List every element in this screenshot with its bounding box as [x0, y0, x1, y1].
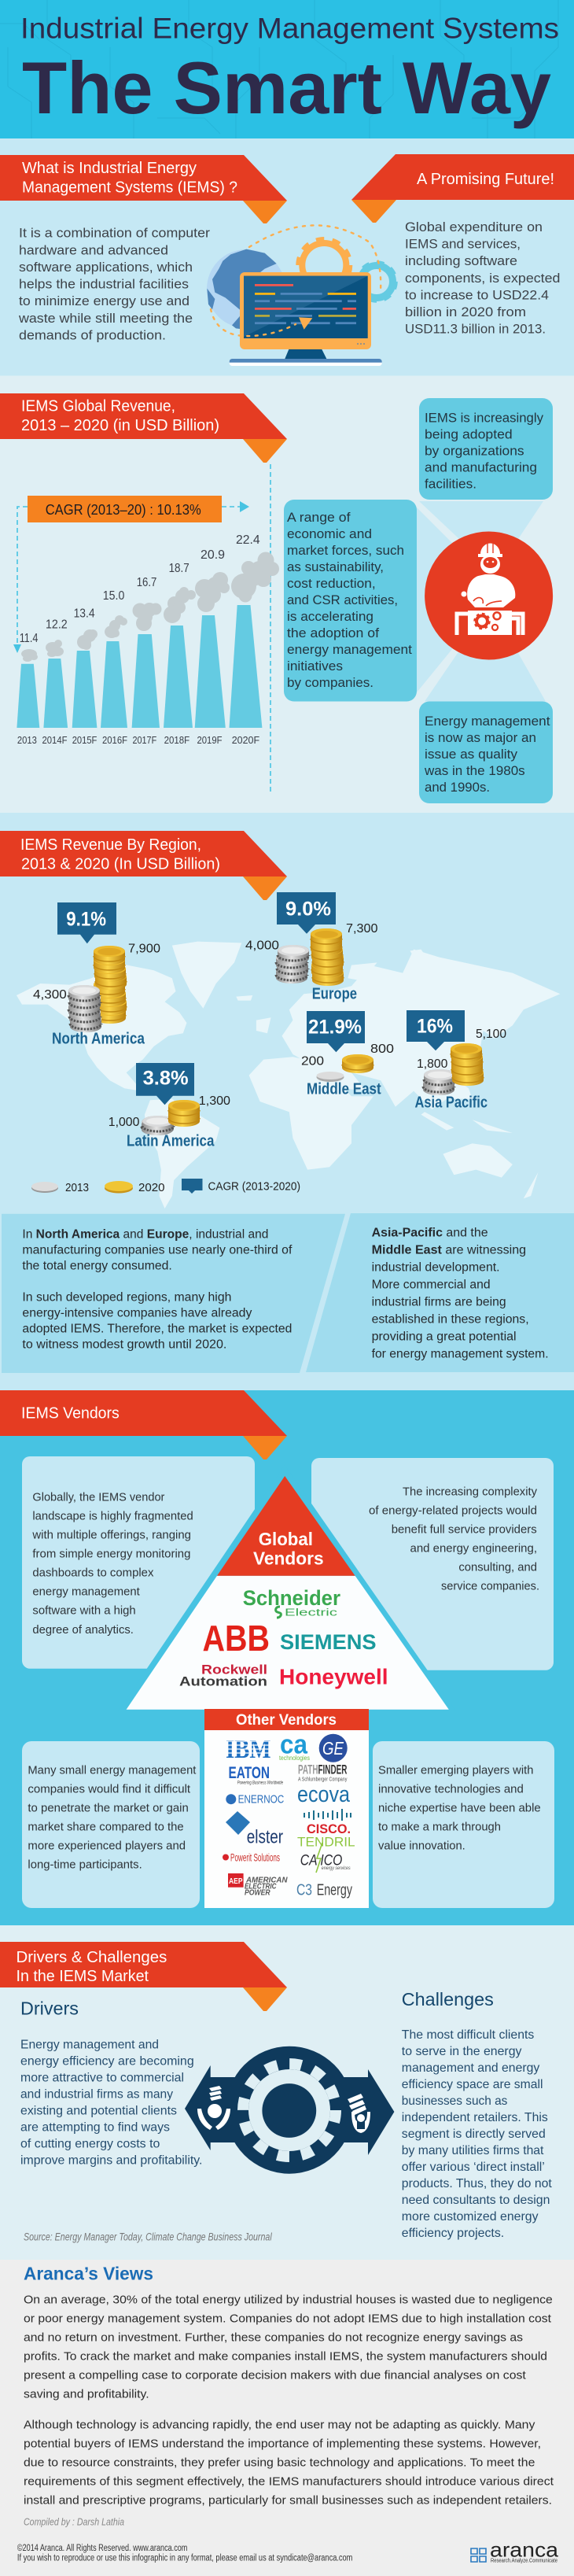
icon: monitor with globe and gears: [207, 225, 396, 366]
text panel: asia-pacific and middle east: providing a great potential: [372, 1330, 517, 1344]
value labels: 13.4: [74, 607, 95, 621]
region: europe: [245, 892, 378, 1002]
text: challenges: more customized energy: [402, 2210, 538, 2224]
ribbon: revenue by region: IEMS Revenue By Region,: [20, 836, 201, 854]
text panel: asia-pacific and middle east: industrial development.: [372, 1261, 500, 1275]
text: views paragraph 2: [24, 2419, 554, 2508]
callout: complexity: [311, 1458, 554, 1670]
text: IEMS definition: It is a combination of computer: [19, 226, 210, 241]
logo: Aranca: Research.Analyze.Communicate: [491, 2557, 557, 2564]
region: europe: Europe: [312, 985, 357, 1002]
region: asia pacific: 1,800: [417, 1057, 448, 1071]
legend: 2013: [65, 1181, 89, 1194]
text: IEMS definition: waste while still meeting the: [18, 311, 193, 326]
callout: market forces: as sustainability,: [287, 560, 384, 574]
callout: market forces: cost reduction,: [287, 577, 376, 591]
text: challenges: The most difficult clients: [402, 2028, 534, 2042]
callout: complexity: service companies.: [441, 1580, 539, 1593]
value labels: 18.7: [169, 562, 189, 575]
year labels: 2015F: [72, 735, 98, 746]
callout: CAGR: CAGR (2013–20) : 10.13%: [46, 501, 201, 518]
value labels: 16.7: [137, 576, 156, 589]
icon: gear with arrows: [185, 2046, 394, 2174]
callout: market forces: market forces, such: [287, 544, 404, 558]
world map: [17, 942, 560, 1209]
logo: Calico: energy services: [322, 1866, 351, 1871]
logo: EnerNOC: ENERNOC: [238, 1792, 284, 1806]
callout: fragmented landscape: energy management: [32, 1585, 141, 1599]
text: promising future: IEMS and services,: [405, 237, 521, 252]
monitor frame: [240, 272, 371, 349]
region: middle east: 21.9%: [308, 1016, 362, 1038]
ribbon: global revenue: [0, 393, 287, 463]
logo: C3 Energy: C3: [296, 1881, 312, 1899]
region: asia pacific: 16%: [417, 1016, 453, 1038]
compiled by: Compiled by : Darsh Lathia: [24, 2515, 124, 2527]
region: middle east: 200: [301, 1055, 324, 1068]
text: views paragraph 1: and no return on investment. Further, these companies do not recognize energy savings as: [24, 2331, 523, 2345]
region: asia pacific: Asia Pacific: [415, 1094, 488, 1112]
callout: complexity: consulting, and: [458, 1561, 537, 1574]
callout: market forces: by companies.: [287, 676, 373, 690]
callout: fragmented landscape: [22, 1456, 255, 1669]
text: drivers: and industrial firms as many: [20, 2087, 173, 2101]
logo: Pathfinder: [298, 1762, 348, 1783]
region: asia pacific: [407, 1010, 506, 1112]
logo: CA technologies: technologies: [279, 1755, 310, 1762]
value labels: 12.2: [46, 618, 68, 632]
logo: Rockwell Automation: [179, 1663, 267, 1688]
callout: small companies: Many small energy management: [28, 1764, 197, 1777]
logo: Aranca: aranca: [490, 2537, 559, 2561]
callout: market forces: energy management: [287, 643, 412, 657]
text: challenges: businesses such as: [402, 2094, 507, 2108]
logo: C3 Energy: Energy: [317, 1881, 352, 1899]
value labels: 11.4: [20, 632, 38, 645]
chimneys: [17, 605, 262, 728]
pyramid: global vendors: Global: [259, 1529, 313, 1549]
callout: small companies: [22, 1741, 200, 1908]
text panel: north america and europe: manufacturing companies use nearly one-third of: [22, 1243, 293, 1257]
callout: adoption: IEMS is increasingly: [425, 411, 544, 425]
ribbon: what is IEMS: Management Systems (IEMS) ?: [22, 179, 237, 196]
callout: emerging players: to make a mark through: [378, 1821, 501, 1834]
year labels: 2018F: [164, 735, 190, 746]
callout: CAGR: [28, 496, 222, 522]
logo: Cisco: [304, 1809, 351, 1836]
logo: AEP: AEP: [229, 1877, 243, 1886]
text: challenges: offer various ‘direct install’: [402, 2161, 545, 2174]
text: views paragraph 1: present a compelling case to corporate decision makers with due financial analyses on cost: [24, 2369, 527, 2382]
year labels: 2013: [17, 735, 37, 746]
region: europe: 4,000: [245, 939, 279, 953]
callout: emerging players: value innovation.: [378, 1840, 465, 1853]
region: latin america: [109, 1063, 230, 1150]
text panel: asia-pacific and middle east: [306, 1213, 574, 1372]
panel: drivers and challenges: [0, 1942, 552, 2243]
logo: GE: [319, 1734, 348, 1762]
pyramid outline: [118, 1465, 456, 1711]
callout: major issue: is now as major an: [425, 731, 536, 745]
logo: Eaton: EATON: [228, 1764, 270, 1782]
text: views paragraph 1: [24, 2293, 553, 2401]
value labels: 20.9: [201, 548, 225, 562]
text panel: asia-pacific and middle east: More commercial and: [372, 1279, 491, 1292]
text: views paragraph 1: profits. To crack the market and make companies install IEMS, the system manufacturers should: [24, 2350, 547, 2364]
year labels: [17, 735, 259, 746]
callout: market forces: the adoption of: [287, 626, 379, 640]
callout: complexity: benefit full service providers: [392, 1523, 537, 1537]
footer copyright: If you wish to reproduce or use this infographic in any format, please email us at syndicate@aranca.com: [17, 2554, 352, 2563]
year labels: 2017F: [132, 735, 157, 746]
legend: [31, 1179, 300, 1194]
text: views paragraph 2: requirements of this segment effectively, the IEMS manufacturers should introduce various direct: [24, 2475, 554, 2489]
footer copyright: [17, 2544, 352, 2563]
text panel: asia-pacific and middle east: for energy management system.: [372, 1348, 549, 1361]
text panel: asia-pacific and middle east: industrial firms are being: [372, 1296, 506, 1309]
icon: orange gear: [298, 239, 350, 291]
text: IEMS definition: to minimize energy use and: [19, 293, 189, 308]
region: middle east: Middle East: [307, 1081, 381, 1098]
region: middle east: 800: [370, 1043, 394, 1056]
text: IEMS definition: demands of production.: [19, 328, 166, 343]
panel: IEMS vendors: [0, 1390, 554, 1908]
logo: Ecova: ecova: [297, 1782, 351, 1807]
value labels: 22.4: [236, 533, 260, 547]
smoke clouds: [21, 552, 279, 662]
text: views paragraph 1: On an average, 30% of the total energy utilized by industrial houses is wasted due to negligence: [24, 2293, 553, 2306]
text: challenges: efficiency space are small: [402, 2078, 543, 2091]
text: promising future: components, is expected: [405, 271, 560, 286]
title line 1: Industrial Energy Management Systems: [20, 13, 559, 44]
logo: Powerit Solutions: [223, 1851, 280, 1863]
text: challenges: products. Thus, they do not: [402, 2177, 552, 2190]
panel: Aranca's views: [17, 2263, 559, 2564]
arrow: cagr down: [13, 644, 21, 653]
ribbon: global revenue: 2013 – 2020 (in USD Billion): [21, 417, 219, 434]
callout: emerging players: [373, 1741, 554, 1908]
panel: other vendors: Other Vendors: [236, 1712, 337, 1729]
text: challenges: management and energy: [402, 2061, 539, 2075]
text panel: asia-pacific and middle east: Middle East are witnessing: [372, 1244, 526, 1257]
icon: bulb in hands: [197, 2086, 230, 2130]
callout: complexity: of energy-related projects would: [369, 1504, 537, 1518]
callout: emerging players: Smaller emerging players with: [378, 1764, 533, 1777]
text: drivers: more attractive to commercial: [20, 2071, 184, 2084]
icon: blue gear: [357, 263, 396, 301]
region: north america: North America: [52, 1031, 145, 1048]
arrow: cagr right: [240, 501, 249, 512]
text: challenges: independent retailers. This: [402, 2111, 548, 2124]
callout: adoption: [419, 398, 553, 500]
text: challenges: efficiency projects.: [402, 2227, 504, 2240]
logo: AEP: ELECTRIC: [245, 1883, 277, 1891]
text: views paragraph 2: potential buyers of IEMS understand the importance of implementing these systems. However,: [24, 2438, 541, 2451]
callout: major issue: [419, 702, 553, 803]
logo: AEP: AMERICAN: [245, 1877, 288, 1885]
callout: fragmented landscape: Globally, the IEMS vendor: [32, 1490, 164, 1504]
title line 2: The Smart Way: [22, 46, 551, 129]
logo: AEP: [228, 1873, 288, 1898]
text panel: north america and europe: the total energy consumed.: [22, 1259, 172, 1272]
text: IEMS definition: helps the industrial facilities: [19, 277, 189, 292]
region: europe: 9.0%: [285, 898, 331, 920]
text: IEMS definition: hardware and advanced: [19, 242, 168, 257]
icon: worker at machine: [425, 532, 553, 659]
heading: drivers: Drivers: [20, 1998, 79, 2019]
callout: market forces: is accelerating: [287, 610, 373, 624]
text: promising future: USD11.3 billion in 2013.: [405, 322, 546, 337]
logo: CA technologies: ca: [280, 1729, 308, 1759]
callout: small companies: to penetrate the market or gain: [28, 1802, 189, 1815]
text: views paragraph 1: or poor energy management system. Companies do not adopt IEMS due to high installation cost: [24, 2312, 552, 2326]
text: promising future: to increase to USD22.4: [405, 288, 549, 302]
logo: Schneider Electric: Electric: [285, 1606, 338, 1618]
text panel: north america and europe: energy-intensive companies have already: [22, 1306, 252, 1319]
text: challenges: need consultants to design: [402, 2194, 550, 2207]
logo: Schneider Electric: Schneider: [243, 1586, 340, 1610]
callout: fragmented landscape: from simple energy monitoring: [32, 1548, 190, 1561]
logo: Tendril: TENDRIL: [297, 1835, 355, 1850]
text: challenges: to serve in the energy: [402, 2045, 522, 2058]
logo: Siemens: SIEMENS: [280, 1630, 377, 1654]
region: north america: [33, 902, 160, 1048]
text panel: asia-pacific and middle east: established in these regions,: [372, 1313, 529, 1327]
logo: Cisco: CISCO.: [307, 1821, 351, 1836]
text: drivers: existing and potential clients: [20, 2104, 177, 2117]
logo: AEP: POWER: [245, 1889, 270, 1898]
text: promising future: including software: [405, 253, 517, 268]
chart: chimney bars: [17, 533, 279, 746]
logo: Elster: elster: [247, 1827, 283, 1848]
callout: market forces: economic and: [287, 527, 372, 541]
callout: adoption: facilities.: [425, 477, 476, 491]
panel: other vendors: [204, 1709, 369, 1908]
callout: adoption: by organizations: [425, 444, 524, 458]
callout: emerging players: innovative technologies and: [378, 1783, 524, 1796]
logo: Eaton: Powering Business Worldwide: [237, 1781, 283, 1786]
region: latin america: 1,300: [199, 1094, 230, 1108]
text: IEMS definition: [18, 226, 210, 343]
pyramid: global vendors: [127, 1476, 449, 1710]
text: drivers: of cutting energy costs to: [20, 2137, 160, 2150]
callout: small companies: more experienced players and: [28, 1840, 186, 1853]
pyramid: global vendors: Vendors: [253, 1548, 324, 1568]
text: IEMS definition: software applications, which: [19, 260, 193, 275]
callout: major issue: issue as quality: [425, 747, 518, 762]
legend: 2020: [138, 1181, 165, 1194]
region: north america: 7,900: [128, 943, 160, 956]
callout: fragmented landscape: with multiple offerings, ranging: [31, 1529, 191, 1542]
panel: header: [0, 0, 559, 138]
year labels: 2019F: [197, 735, 223, 746]
text panel: north america and europe: In North America and Europe, industrial and: [22, 1227, 268, 1241]
text: drivers: improve margins and profitability.: [20, 2153, 202, 2167]
region: middle east: [301, 1011, 394, 1098]
callout: emerging players: niche expertise have been able: [378, 1802, 541, 1815]
logo: C3 Energy: [296, 1881, 352, 1899]
text: drivers: Energy management and: [20, 2038, 159, 2051]
logo: Pathfinder: A Schlumberger Company: [298, 1777, 348, 1783]
text panel: north america and europe: to witness modest growth until 2020.: [22, 1338, 226, 1351]
text: views paragraph 2: Although technology is advancing rapidly, the end user may not be adapting as quickly. Many: [24, 2419, 535, 2432]
region: latin america: 1,000: [109, 1116, 140, 1129]
legend: CAGR (2013-2020): [208, 1180, 300, 1194]
logo: ABB: ABB: [203, 1618, 270, 1659]
text panel: north america and europe: adopted IEMS. Therefore, the market is expected: [22, 1322, 292, 1335]
ribbon: what is IEMS: What is Industrial Energy: [22, 160, 197, 177]
text: promising future: Global expenditure on: [405, 220, 543, 234]
panel: IEMS global revenue: [0, 393, 553, 803]
logo: Honeywell: Honeywell: [279, 1665, 388, 1689]
callout: fragmented landscape: degree of analytics.: [32, 1623, 134, 1637]
ribbon: drivers and challenges: Drivers & Challenges: [16, 1949, 167, 1966]
text: drivers: [20, 2038, 202, 2167]
icon: globe: [207, 249, 285, 329]
dashed guide lines: [17, 464, 270, 794]
ribbon: revenue by region: [0, 831, 287, 900]
logo: Rockwell Automation: Rockwell: [201, 1663, 267, 1677]
text panel: north america and europe: In such developed regions, many high: [22, 1290, 231, 1304]
value labels: 15.0: [103, 589, 124, 603]
connector shapes around worker circle: [417, 501, 546, 702]
icon: person with coil: [348, 2094, 370, 2133]
callout: adoption: being adopted: [425, 427, 513, 441]
panel: revenue by region: [0, 831, 574, 1373]
region: north america: 4,300: [33, 988, 67, 1002]
ribbon: what is IEMS: [0, 155, 287, 223]
callout: fragmented landscape: software with a high: [32, 1604, 136, 1618]
heading: Aranca's views: Aranca’s Views: [24, 2263, 153, 2283]
callout: fragmented landscape: dashboards to complex: [32, 1567, 154, 1580]
region: north america: 9.1%: [66, 909, 106, 931]
text: promising future: billion in 2020 from: [405, 304, 526, 319]
text panel: north america and europe: [2, 1214, 345, 1373]
footer copyright: ©2014 Aranca. All Rights Reserved. www.aranca.com: [17, 2544, 187, 2553]
callout: major issue: and 1990s.: [425, 781, 490, 795]
text: challenges: segment is directly served: [402, 2128, 546, 2141]
circuit pattern: [0, 0, 558, 138]
logo: Powerit Solutions: Powerit Solutions: [230, 1851, 280, 1863]
logo: Rockwell Automation: Automation: [179, 1674, 267, 1688]
region: latin america: 3.8%: [143, 1068, 189, 1090]
ribbon: a promising future: [351, 154, 574, 223]
text: drivers: are attempting to find ways: [20, 2120, 170, 2134]
logo: Elster: [226, 1811, 283, 1848]
text panel: asia-pacific and middle east: Asia-Pacific and the: [372, 1227, 488, 1240]
logo: Pathfinder: PATHFINDER: [298, 1762, 347, 1777]
panel: what is IEMS: [0, 154, 574, 366]
text: promising future: [405, 220, 560, 337]
callout: complexity: and energy engineering,: [410, 1542, 537, 1556]
region: latin america: Latin America: [127, 1133, 215, 1150]
callout: major issue: was in the 1980s: [424, 764, 525, 778]
source note: Source: Energy Manager Today, Climate Change Business Journal: [24, 2231, 272, 2243]
logo: Aranca: [471, 2537, 559, 2564]
region: europe: 7,300: [346, 922, 378, 936]
ribbon: vendors: IEMS Vendors: [21, 1405, 120, 1423]
callout: small companies: market share compared to the: [28, 1821, 184, 1834]
text: challenges: by many utilities firms that: [402, 2144, 544, 2157]
logo: EnerNOC: [226, 1792, 284, 1806]
region: asia pacific: 5,100: [476, 1028, 506, 1041]
callout: market forces: [284, 500, 417, 702]
callout: major issue: Energy management: [425, 714, 550, 729]
callout: adoption: and manufacturing: [425, 460, 537, 474]
ribbon: drivers and challenges: [0, 1942, 287, 2011]
heading: challenges: Challenges: [402, 1989, 494, 2010]
callout: market forces: initiatives: [287, 659, 343, 674]
logo: Calico: CA ICO: [300, 1853, 342, 1869]
text: views paragraph 2: install and prescriptive programs, particularly for small businesses such as independent retailers.: [24, 2494, 552, 2508]
year labels: 2020F: [232, 735, 259, 746]
ribbon: drivers and challenges: In the IEMS Market: [16, 1968, 149, 1985]
ribbon: vendors: [0, 1390, 287, 1460]
value labels: [20, 533, 260, 645]
callout: small companies: long-time participants.: [28, 1858, 142, 1872]
text: challenges: [402, 2028, 552, 2240]
logo: GE: GE: [322, 1738, 344, 1759]
text: drivers: energy efficiency are becoming: [20, 2054, 194, 2068]
callout: small companies: companies would find it difficult: [28, 1783, 191, 1796]
ribbon: a promising future: A Promising Future!: [417, 171, 554, 188]
ribbon: revenue by region: 2013 & 2020 (In USD Billion): [21, 855, 220, 873]
callout: market forces: and CSR activities,: [287, 593, 398, 607]
year labels: 2016F: [102, 735, 127, 746]
text: views paragraph 2: due to resource constraints, they prefer using basic technology and applications. To meet the: [24, 2456, 535, 2470]
callout: complexity: The increasing complexity: [403, 1485, 537, 1499]
logo: IBM: IBM: [226, 1735, 270, 1764]
callout: market forces: A range of: [287, 511, 351, 525]
callout: fragmented landscape: landscape is highly fragmented: [32, 1509, 193, 1522]
year labels: 2014F: [42, 735, 68, 746]
ribbon: global revenue: IEMS Global Revenue,: [21, 398, 175, 415]
text: views paragraph 1: saving and profitability.: [24, 2388, 149, 2401]
logo: Calico: [300, 1843, 351, 1873]
